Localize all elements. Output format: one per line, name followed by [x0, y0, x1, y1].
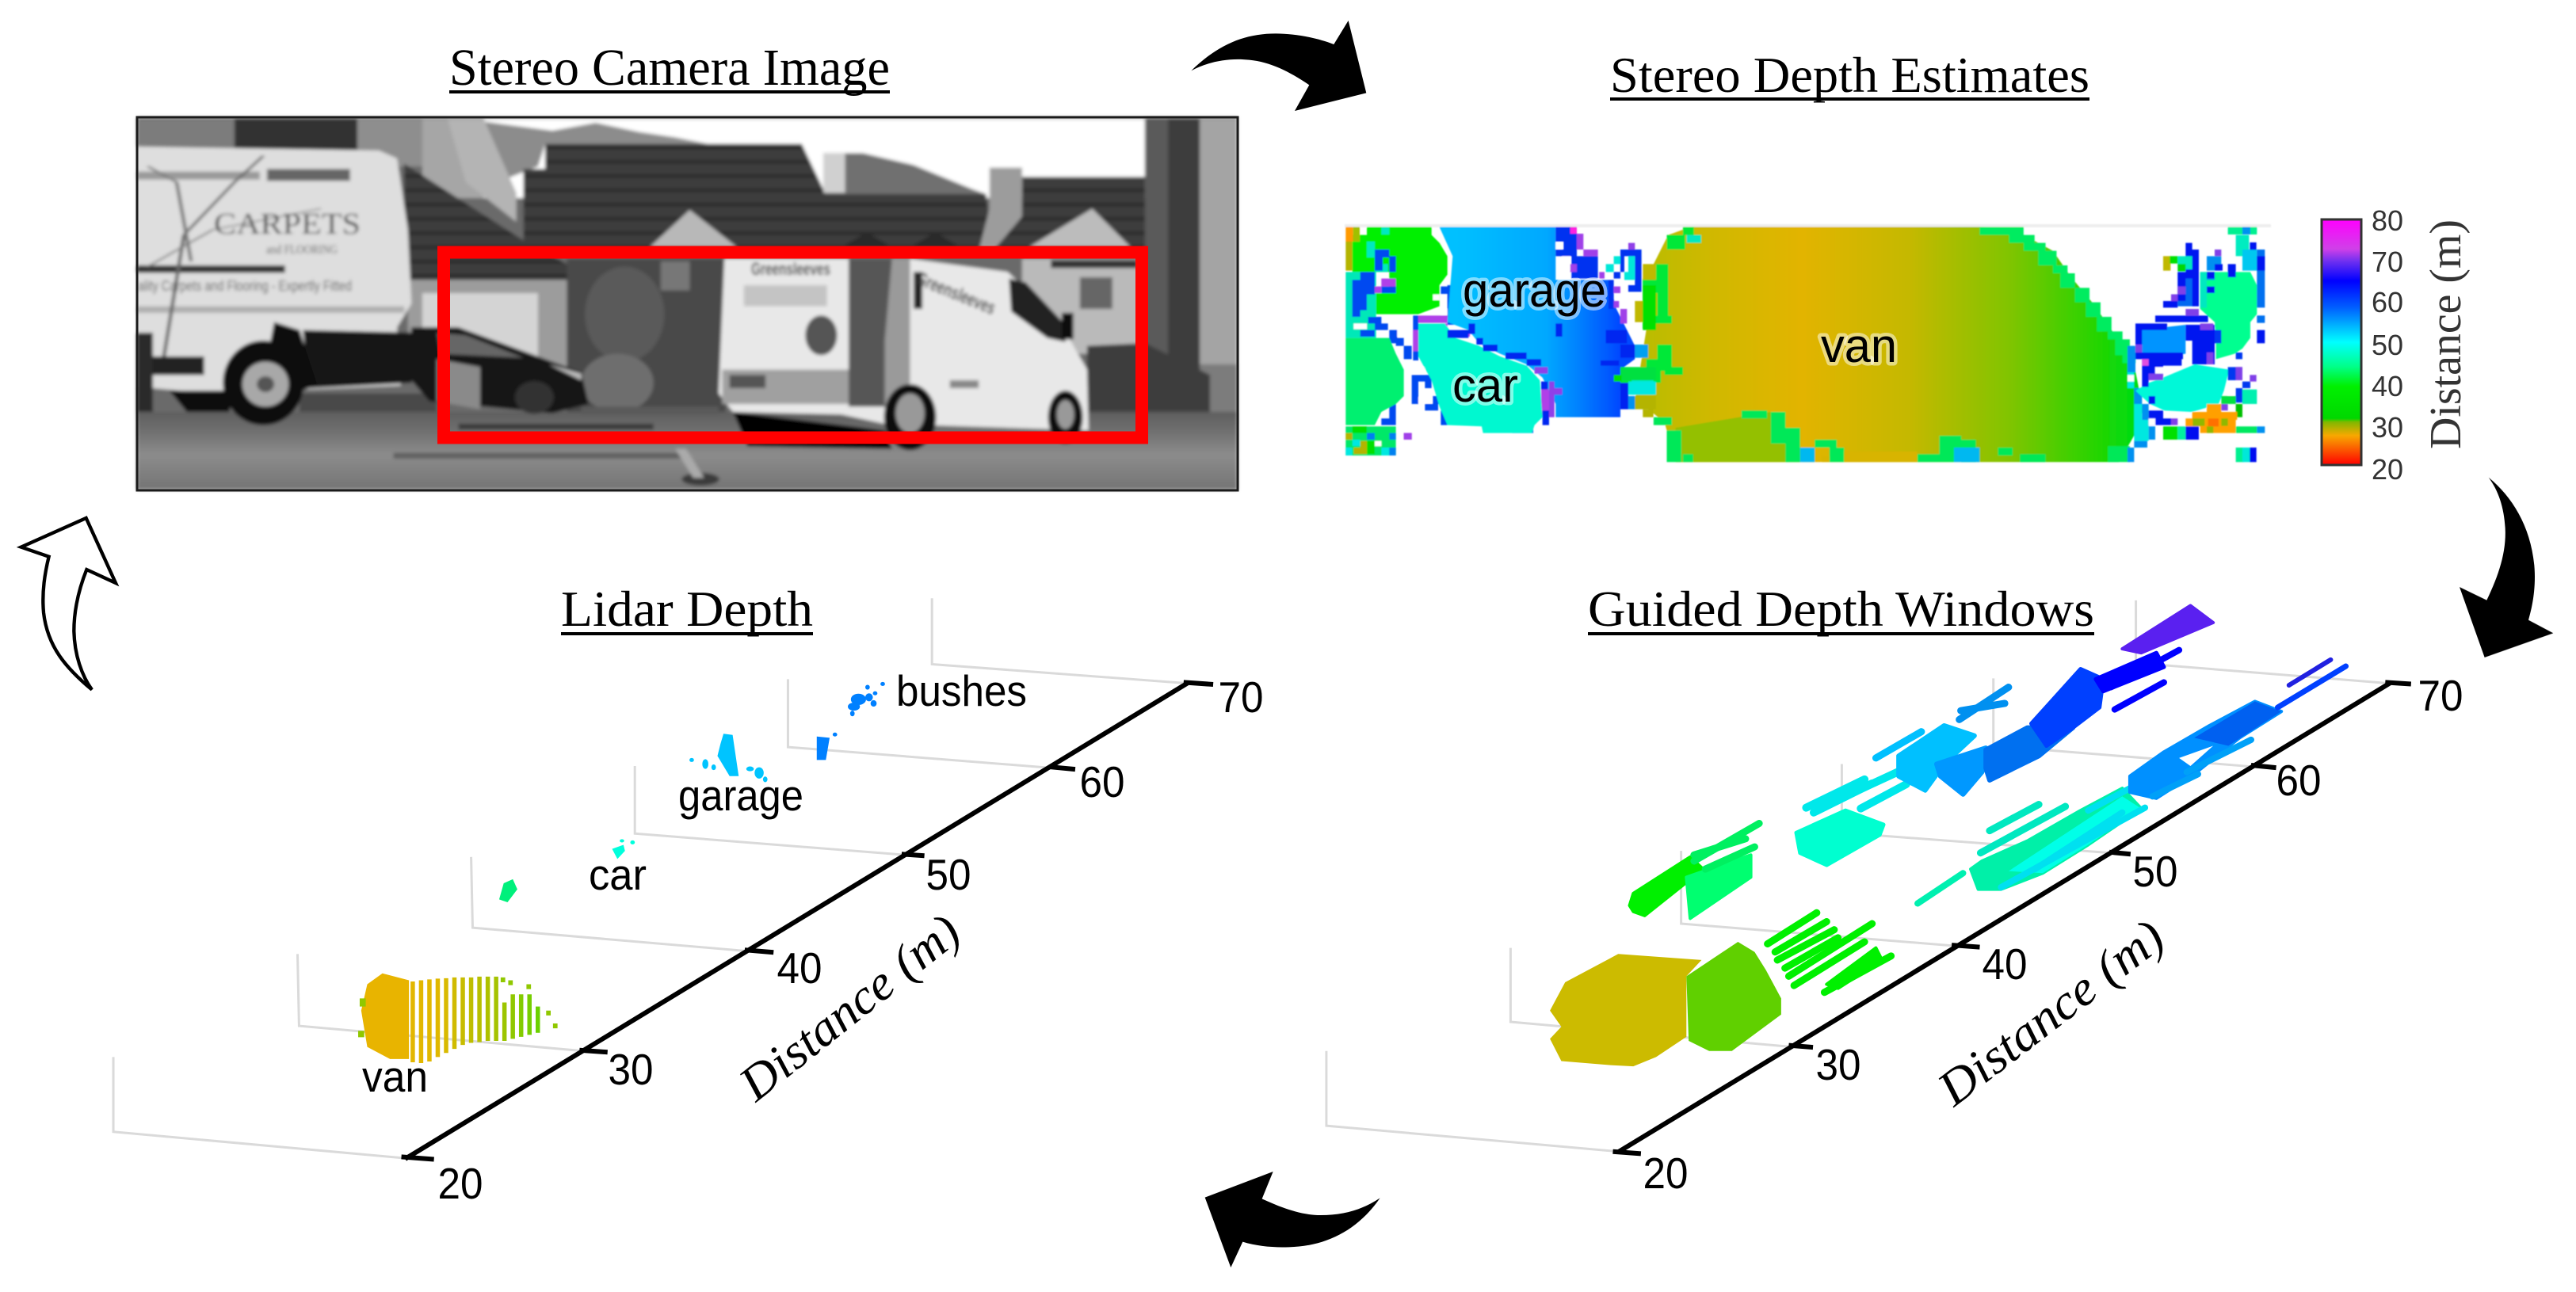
colorbar: distance scale: 40	[2372, 370, 2403, 402]
title: Guided Depth Windows: Guided Depth Windows	[1588, 581, 2094, 637]
colorbar: distance scale: 20	[2372, 453, 2403, 486]
panel: stereo camera photo: Greensleeves	[914, 269, 998, 319]
label: bushes: bushes	[896, 666, 1027, 715]
label: car: car	[589, 850, 647, 899]
colorbar: distance scale: Distance (m)	[2421, 219, 2471, 449]
axis tick labels: 60	[1079, 757, 1125, 806]
axis tick labels: 40	[777, 943, 822, 993]
axis tick labels: 70	[1219, 673, 1263, 722]
label: car: car	[1452, 359, 1518, 412]
depth window shapes	[1550, 605, 2346, 1066]
lidar point clouds	[358, 682, 885, 1063]
title: Stereo Camera Image: Stereo Camera Image	[449, 39, 890, 97]
arrow: left outlined, lidar to camera	[21, 518, 116, 690]
label: van: van	[1821, 319, 1897, 372]
panel: lidar depth 3D plot	[113, 598, 1263, 1208]
axis tick labels: 30	[609, 1045, 653, 1094]
panel: stereo depth heatmap	[1345, 224, 2271, 462]
panel: guided depth windows 3D plot	[1326, 600, 2463, 1198]
left tree, garage and car regions	[1345, 227, 1656, 455]
depth grid lines	[113, 598, 1186, 1158]
colorbar: distance scale: 30	[2372, 411, 2403, 444]
colorbar: distance scale: 80	[2372, 204, 2403, 237]
axis tick labels	[1643, 671, 2463, 1198]
label: garage: garage	[678, 771, 803, 820]
label: van: van	[362, 1052, 428, 1101]
panel: stereo camera photo	[137, 117, 1238, 490]
axis tick labels: 20	[1643, 1149, 1688, 1198]
distance axis with ticks	[402, 682, 1213, 1159]
title: Stereo Depth Estimates: Stereo Depth Estimates	[1610, 47, 2089, 103]
axis tick labels: 40	[1983, 939, 2027, 989]
arrow: right, stereo to guided windows	[2460, 478, 2553, 657]
colorbar: distance scale	[2322, 204, 2471, 486]
depth grid lines	[1326, 600, 2387, 1151]
axis tick labels	[437, 673, 1263, 1208]
axis tick labels: 20	[437, 1159, 483, 1208]
van region	[1613, 227, 2143, 462]
axis tick labels: 50	[925, 850, 971, 899]
axis title: Distance (m)	[1927, 909, 2174, 1117]
label: garage: garage	[1463, 264, 1606, 317]
colorbar: distance scale: 70	[2372, 246, 2403, 278]
panel: stereo camera photo: CARPETS	[214, 208, 361, 241]
axis tick labels: 50	[2133, 847, 2177, 896]
arrow: top, camera to stereo	[1191, 21, 1366, 111]
axis title: Distance (m)	[729, 904, 971, 1112]
axis tick labels: 30	[1816, 1040, 1860, 1089]
panel: stereo camera photo: Greensleeves	[751, 259, 830, 279]
colorbar: distance scale: 50	[2372, 329, 2403, 361]
photo frame	[137, 117, 1238, 490]
distance axis with ticks	[1613, 682, 2411, 1153]
title: Lidar Depth: Lidar Depth	[561, 581, 813, 637]
red region of interest box	[444, 252, 1142, 437]
axis tick labels: 60	[2276, 756, 2322, 805]
colorbar: distance scale: 60	[2372, 286, 2403, 318]
panel: stereo camera photo: ality Carpets and Flooring - Expertly Fitted	[138, 278, 352, 294]
arrow: bottom, guided windows to lidar	[1205, 1172, 1380, 1267]
axis tick labels: 70	[2418, 671, 2463, 720]
panel: stereo camera photo: and FLOORING	[266, 243, 338, 257]
right bush cluster region	[2128, 227, 2265, 462]
